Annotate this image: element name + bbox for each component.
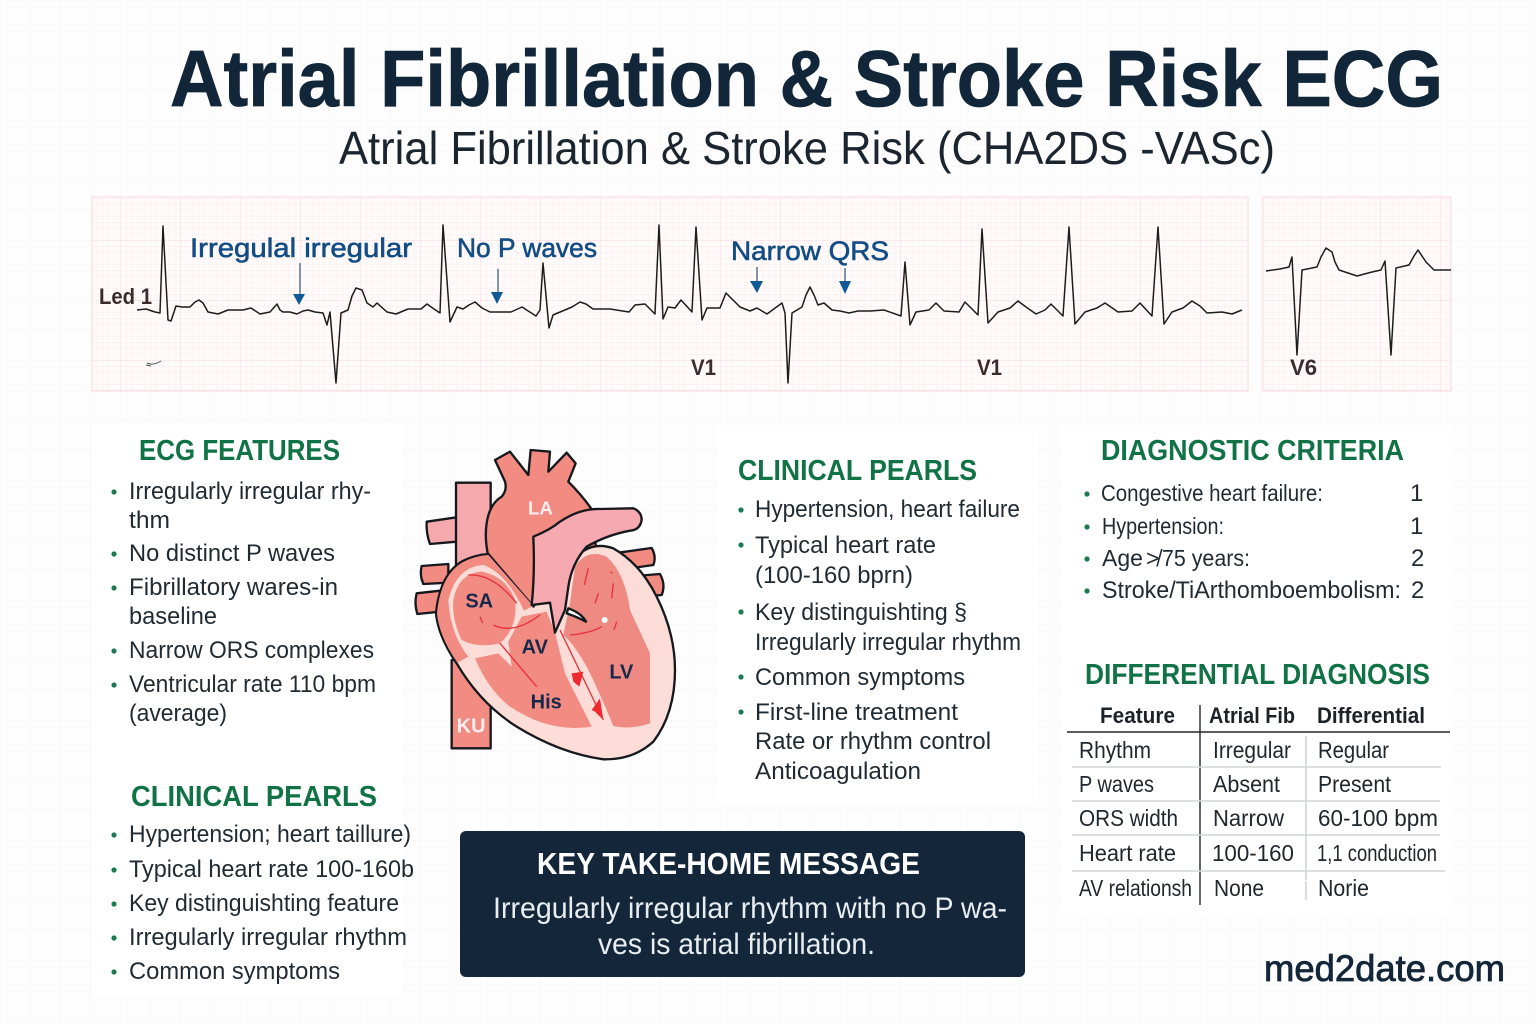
bullet list: Key distinguishting § <box>755 599 967 626</box>
criteria list: Age <box>1102 545 1143 571</box>
criteria list: 1 <box>1410 480 1423 507</box>
bullet list: Irregularly irregular rhy- <box>129 478 371 505</box>
pulmonary artery <box>532 508 642 633</box>
bullet list: No distinct P waves <box>129 540 335 567</box>
left ventricle chamber <box>563 554 650 727</box>
bullet list: Narrow ORS complexes <box>129 637 374 664</box>
callout: key take-home message: Irregularly irregular rhythm with no P wa- <box>493 892 1007 925</box>
table: Norie <box>1318 875 1369 901</box>
heart body <box>436 546 675 759</box>
table: None <box>1214 875 1264 901</box>
annotation: irregular: Irregulal irregular <box>190 233 412 263</box>
annotation: no P waves: No P waves <box>457 233 597 263</box>
callout: key take-home message: ves is atrial fibrillation. <box>598 928 875 961</box>
table: ORS width <box>1079 805 1178 831</box>
label: V1 first: V1 <box>691 355 716 380</box>
heading: DIFFERENTIAL DIAGNOSIS <box>1085 659 1430 691</box>
bullet list: Hypertension; heart taillure) <box>129 821 411 848</box>
criteria list: 2 <box>1411 545 1424 572</box>
criteria list: Congestive heart failure: <box>1101 480 1323 506</box>
label: V1 second: V1 <box>977 355 1002 380</box>
table: Feature <box>1100 703 1175 728</box>
table: Regular <box>1318 737 1389 763</box>
heading: ECG FEATURES <box>139 435 340 467</box>
label LV: LV <box>609 662 634 684</box>
criteria list <box>1084 480 1424 604</box>
arrow 2 <box>491 269 503 304</box>
ECG trace: lead I and V1 <box>137 225 1242 383</box>
bullet list <box>738 496 1021 785</box>
table <box>1067 703 1450 905</box>
panel: ECG strip <box>92 197 1451 391</box>
label: Lead 1: Led 1 <box>99 284 152 309</box>
aorta and atrium <box>486 450 600 607</box>
label AV: AV <box>522 636 549 658</box>
conduction lines <box>468 568 617 720</box>
table: P waves <box>1079 771 1154 797</box>
subtitle: Atrial Fibrillation & Stroke Risk (CHA2DS -VASc) <box>339 122 1275 174</box>
panel: differential diagnosis <box>1067 659 1450 905</box>
label SA: SA <box>465 590 493 612</box>
table: AV relationsh <box>1079 875 1192 901</box>
vessel stubs <box>415 483 663 748</box>
bullet list: baseline <box>129 603 217 630</box>
bullet list: Key distinguishting feature <box>129 890 399 917</box>
bullet list: Ventricular rate 110 bpm <box>129 671 376 698</box>
label LA: LA <box>528 498 553 519</box>
bullet list <box>111 478 376 727</box>
table: 60-100 bpm <box>1318 805 1438 831</box>
heading: CLINICAL PEARLS <box>131 781 377 813</box>
bullet list: Common symptoms <box>129 958 340 985</box>
criteria list: Hypertension: <box>1102 513 1224 539</box>
title: Atrial Fibrillation & Stroke Risk ECG <box>170 34 1443 123</box>
outer right atrial wall <box>437 555 533 663</box>
arrow 3 <box>750 267 763 293</box>
label: V6: V6 <box>1290 355 1317 380</box>
bullet list: Hypertension, heart failure <box>755 496 1020 523</box>
bullet list: (average) <box>129 700 227 727</box>
bullet list: Irregularly irregular rhythm <box>129 924 407 951</box>
callout: key take-home message <box>460 831 1025 977</box>
callout: key take-home message: KEY TAKE-HOME MESSAGE <box>537 846 920 881</box>
bullet list: (100-160 bprn) <box>755 562 913 589</box>
bullet list: Typical heart rate <box>755 532 936 559</box>
table: 1,1 conduction <box>1317 840 1437 866</box>
bullet list: Irregularly irregular rhythm <box>755 629 1021 656</box>
criteria list: 1 <box>1410 513 1423 540</box>
heading: DIAGNOSTIC CRITERIA <box>1101 435 1404 467</box>
bullet list: Rate or rhythm control <box>755 728 991 755</box>
bullet list: thm <box>129 507 170 534</box>
criteria list: Stroke/TiArthomboembolism: <box>1102 577 1401 604</box>
panel: clinical pearls left <box>111 781 414 985</box>
criteria list: ≯ <box>1146 545 1163 571</box>
bullet list: Fibrillatory wares-in <box>129 574 338 601</box>
panel: ECG features <box>111 435 376 727</box>
conduction arrows <box>572 672 603 720</box>
table: Irregular <box>1213 737 1291 763</box>
right atrium chamber <box>453 572 516 645</box>
table: Differential <box>1317 703 1425 728</box>
table: Heart rate <box>1079 840 1176 866</box>
table: 100-160 <box>1212 840 1294 866</box>
arrow 1 <box>293 263 305 305</box>
table: Absent <box>1213 771 1281 797</box>
heart illustration <box>415 450 675 759</box>
table: Narrow <box>1213 805 1284 831</box>
bullet list: Typical heart rate 100-160b <box>129 856 414 883</box>
bullet list: First-line treatment <box>755 699 958 726</box>
criteria list: 75 years: <box>1162 545 1250 571</box>
annotation: narrow QRS: Narrow QRS <box>731 236 889 266</box>
label His: His <box>531 692 562 714</box>
table: Present <box>1318 771 1392 797</box>
heading: CLINICAL PEARLS <box>738 455 977 487</box>
label KU: KU <box>457 716 486 738</box>
panel: clinical pearls middle <box>738 455 1021 785</box>
right ventricle chamber <box>475 612 592 728</box>
brand: med2date.com: med2date.com <box>1264 948 1505 989</box>
bullet list: Anticoagulation <box>755 758 921 785</box>
stray mark <box>146 361 161 366</box>
criteria list: 2 <box>1411 577 1424 604</box>
panel: diagnostic criteria <box>1084 435 1424 604</box>
bullet list <box>111 821 414 985</box>
table: Rhythm <box>1079 737 1151 763</box>
bullet list: Common symptoms <box>755 664 965 691</box>
ECG trace: V6 <box>1266 248 1451 355</box>
arrow 4 <box>839 268 851 294</box>
table: Atrial Fib <box>1209 703 1295 728</box>
valve <box>567 608 586 622</box>
